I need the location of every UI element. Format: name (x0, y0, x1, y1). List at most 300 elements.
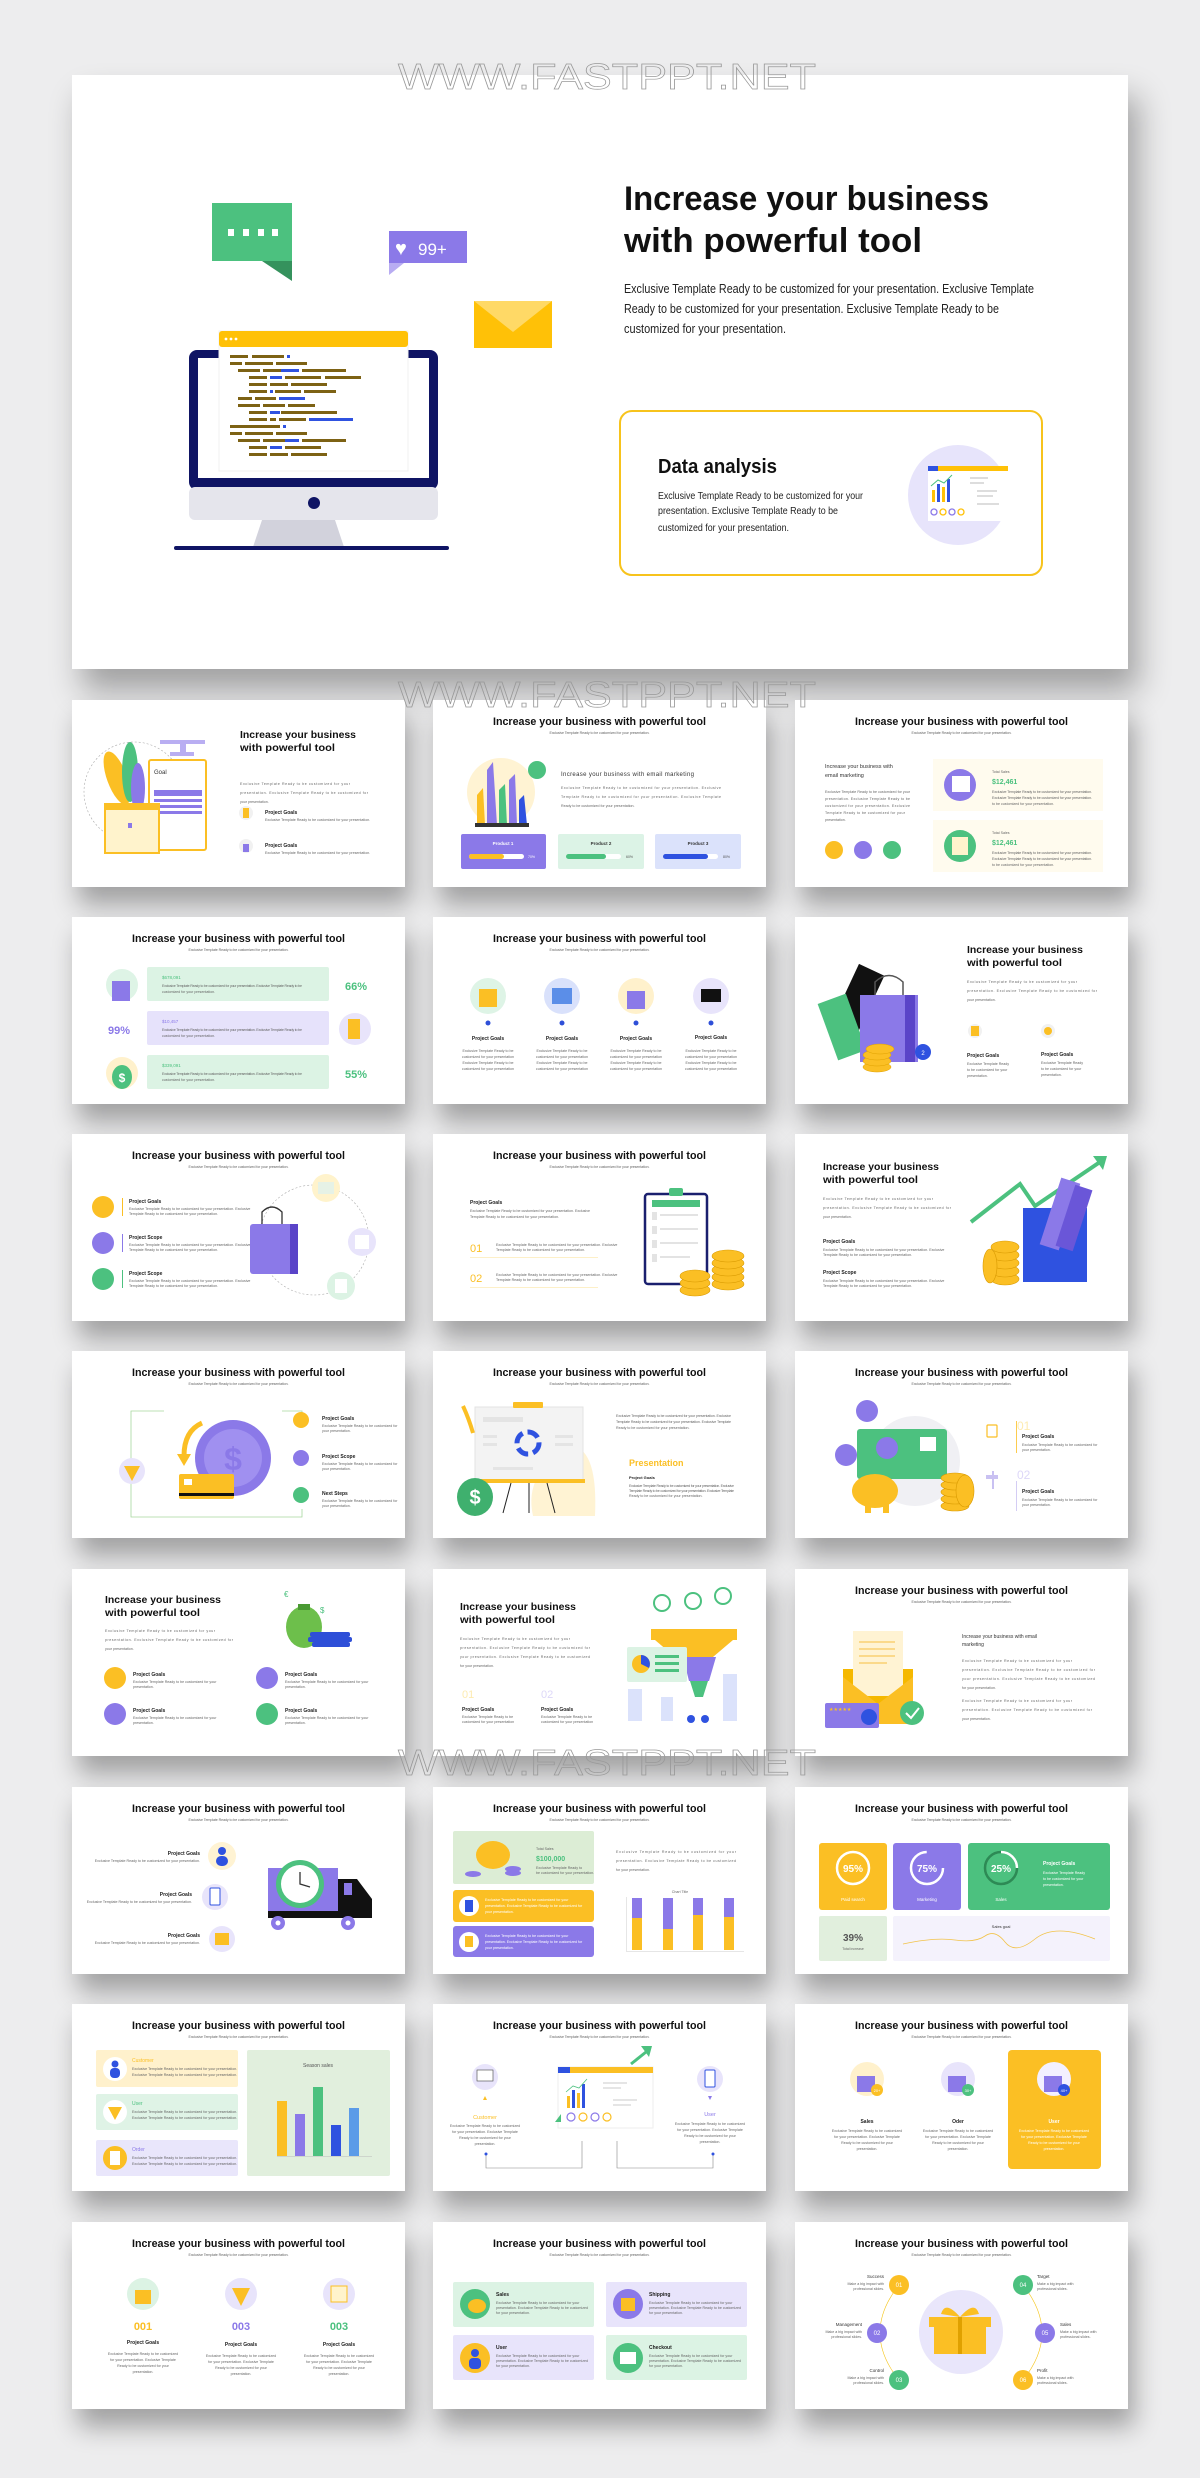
slide: percentages: $10,457 (162, 1019, 179, 1024)
slide: shopping bag and card (795, 917, 1128, 1104)
slide: numbered goals: 003 (330, 2321, 348, 2333)
panel: data analysis: Exclusive Template Ready to be customized for your (658, 490, 863, 502)
slide: email envelope: your presentation. Exclusive Template Ready to be customized (962, 1677, 1095, 1681)
slide: four project goals: Increase your business with powerful tool (493, 933, 706, 945)
slide: piggy bank stacked chart: Increase your business with powerful tool (493, 1803, 706, 1815)
slide: products progress: Ready to be customized for your presentation. (561, 804, 635, 808)
slide: numbered goals: Exclusive Template Ready to be customized (108, 2352, 178, 2356)
slide: numbered goals: Project Goals (323, 2342, 355, 2348)
slide: sales shipping user checkout: Exclusive Template Ready to be customized for your (496, 2354, 580, 2358)
slide: piggy bank: Exclusive Template Ready to be customized for (1022, 1498, 1098, 1502)
slide: season sales (72, 2004, 405, 2191)
slide: delivery truck: Increase your business with powerful tool (132, 1803, 345, 1815)
slide: growth arrow: Template Ready to be customized for your presentation. (823, 1253, 912, 1257)
slide: gift with six steps: Target (1037, 2274, 1050, 2279)
slide: numbered goals: presentation. (329, 2372, 349, 2376)
slide: dollar coin and steps: your presentation. (322, 1429, 351, 1433)
slide: sales shipping user checkout: Exclusive Template Ready to be customized for your (649, 2354, 733, 2358)
slide: products progress: Exclusive Template Ready to be customized for your presentation. Exclusive (561, 786, 721, 790)
slide: money bag goals: Exclusive Template Ready to be customized for your (285, 1716, 369, 1720)
slide: dollar coin and steps (72, 1351, 405, 1538)
slide: four project goals: customized for your presentation (685, 1067, 737, 1071)
slide: funnel: customized for your presentation (462, 1720, 514, 1724)
slide: piggy bank stacked chart: Exclusive Template Ready to be customized for your (485, 1934, 569, 1938)
slide: numbered goals: Increase your business with powerful tool (132, 2238, 345, 2250)
slide: money bag goals: presentation. Exclusive Template Ready to be customized for (105, 1638, 234, 1642)
slide: funnel: Project Goals (541, 1707, 573, 1713)
icon: envelope (474, 301, 552, 348)
slide: clipboard and coins: Exclusive Template Ready to be customized for your presentation. Exclusive (470, 1209, 590, 1213)
slide: gift with six steps: 02 (874, 2331, 881, 2337)
slide: percentages: $339,091 (162, 1063, 181, 1068)
slide: sales order user: User (1048, 2119, 1060, 2125)
slide: percentages: Exclusive Template Ready to be customized for your presentation. (188, 948, 288, 952)
slide: percentages: Increase your business with powerful tool (132, 933, 345, 945)
slide: piggy bank stacked chart: your presentation. (485, 1946, 514, 1950)
slide: sales shipping user checkout (433, 2222, 766, 2409)
slide: season sales: Customer (132, 2058, 154, 2064)
slide: four project goals: Project Goals (472, 1036, 504, 1042)
slide: gift with six steps: professional slides. (1037, 2381, 1068, 2385)
slide: piggy bank stacked chart: for your presentation. (616, 1868, 650, 1872)
slide: sales order user: for your presentation. Exclusive Template (1021, 2135, 1087, 2139)
slide: products progress: 80% (723, 855, 730, 859)
slide: total sales cards: Exclusive Template Ready to be customized for your presentation. (912, 731, 1012, 735)
slide: presentation easel: Increase your business with powerful tool (493, 1367, 706, 1379)
slide: presentation easel: $ (469, 1487, 481, 1509)
slide: numbered goals: Project Goals (127, 2340, 159, 2346)
slide: sales order user: presentation. (857, 2147, 877, 2151)
slide: clipboard and coins: Exclusive Template Ready to be customized for your presentation. (550, 1165, 650, 1169)
slide: goal clipboard: Exclusive Template Ready to be customized for your presentation. (265, 851, 370, 855)
slide: sales shipping user checkout: User (496, 2345, 507, 2351)
slide: total sales cards: Exclusive Template Ready to be customized for your presentation. (992, 857, 1092, 861)
slide: season sales: Exclusive Template Ready to be customized for your presentation. (132, 2067, 237, 2071)
icon: dashboard (908, 445, 1008, 545)
slide: money bag goals: presentation. (133, 1721, 154, 1725)
slide: four project goals: customized for your presentation (536, 1055, 588, 1059)
slide: delivery truck: Exclusive Template Ready to be customized for your presentation. (95, 1859, 200, 1863)
slide: gift with six steps: Profit (1037, 2368, 1048, 2373)
slide: presentation easel: Ready to be customized for your presentation. (616, 1426, 690, 1430)
slide: dollar coin and steps: Exclusive Template Ready to be customized for (322, 1462, 398, 1466)
slide: sales shipping user checkout: Exclusive Template Ready to be customized for your presentation. (550, 2253, 650, 2257)
slide: goals around circle: Exclusive Template Ready to be customized for your presentation. Exclusive (129, 1243, 250, 1247)
slide: sales order user: Increase your business with powerful tool (855, 2020, 1068, 2032)
slide: goals around circle (72, 1134, 405, 1321)
slide: gift with six steps: professional slides. (853, 2287, 884, 2291)
slide: dollar coin and steps: Exclusive Template Ready to be customized for (322, 1424, 398, 1428)
slide: four project goals: Exclusive Template Ready to be (536, 1049, 588, 1053)
slide: growth arrow (795, 1134, 1128, 1321)
paragraph: Ready to be customized for your presentation. Exclusive Template Ready to be (624, 302, 999, 316)
title: Increase your business (624, 180, 989, 218)
slide: products progress: Increase your business with email marketing (561, 772, 694, 778)
slide: numbered goals: Exclusive Template Ready to be customized (206, 2354, 276, 2358)
slide: total sales cards: Total Sales (992, 770, 1010, 774)
slide: clipboard and coins: Template Ready to be customized for your presentation. (496, 1278, 585, 1282)
slide: dollar coin and steps: Increase your business with powerful tool (132, 1367, 345, 1379)
slide: sales order user: Exclusive Template Ready to be customized (1019, 2129, 1089, 2133)
slide: gift with six steps: professional slides. (831, 2335, 862, 2339)
paragraph (624, 282, 1034, 336)
slide: products progress: Exclusive Template Ready to be customized for your presentation. (550, 731, 650, 735)
slide: goal clipboard: Exclusive Template Ready to be customized for your presentation. (265, 818, 370, 822)
hero slide (72, 75, 1128, 669)
slide: dollar coin and steps: Project Scope (322, 1454, 356, 1460)
slide: total sales cards: presentation. Exclusive Template Ready to be (825, 797, 910, 801)
title: with powerful tool (623, 222, 922, 260)
slide: goals around circle: Exclusive Template Ready to be customized for your presentation. Exclusive (129, 1207, 250, 1211)
slide: season sales: Exclusive Template Ready to be customized for your presentation. (132, 2073, 237, 2077)
slide: piggy bank: Project Goals (1022, 1434, 1054, 1440)
slide: money bag goals: with powerful tool (104, 1608, 200, 1619)
slide: shopping bag and card: presentation. (1041, 1073, 1062, 1077)
slide: funnel: for your presentation. (460, 1664, 494, 1668)
slide: season sales: Exclusive Template Ready to be customized for your presentation. (132, 2110, 237, 2114)
slide: piggy bank stacked chart: your presentation. (485, 1910, 514, 1914)
slide: goal clipboard: Increase your business (240, 730, 356, 741)
slide: money bag goals: Exclusive Template Ready to be customized for your (105, 1629, 216, 1633)
slide: piggy bank stacked chart: Chart Title (672, 1890, 688, 1894)
slide: numbered goals: 003 (232, 2321, 250, 2333)
slide: sales shipping user checkout: Checkout (649, 2345, 672, 2351)
icon: green chat bubble (212, 203, 292, 281)
slide: presentation easel: Project Goals (629, 1475, 656, 1480)
slide: piggy bank: 01 (1017, 1419, 1031, 1433)
slide: shopping bag and card: presentation. (967, 1074, 988, 1078)
slide: growth arrow: Exclusive Template Ready to be customized for your (823, 1197, 934, 1201)
slide: customer and user flow: Increase your business with powerful tool (493, 2020, 706, 2032)
slide: sales shipping user checkout: for your presentation. (649, 2311, 683, 2315)
slide: customer and user flow: presentation. (475, 2142, 495, 2146)
slide: goal clipboard: Project Goals (265, 810, 297, 816)
slide: sales order user: Oder (952, 2119, 964, 2125)
slide: season sales: Exclusive Template Ready to be customized for your presentation. (132, 2156, 237, 2160)
slide: goal clipboard: Goal (154, 770, 167, 776)
panel: data analysis: customized for your presentation. (658, 522, 789, 534)
slide: growth arrow: Exclusive Template Ready to be customized for your presentation. Exclusive (823, 1248, 944, 1252)
slide: numbered goals: for your presentation. Exclusive Template (306, 2360, 372, 2364)
slide: sales order user: Exclusive Template Ready to be customized (923, 2129, 993, 2133)
slide: piggy bank stacked chart: presentation. Exclusive Template Ready to be customized (616, 1859, 736, 1863)
slide: goals around circle: Template Ready to be customized for your presentation. (129, 1248, 218, 1252)
slide: funnel (433, 1569, 766, 1756)
slide: shopping bag and card: Project Goals (1041, 1052, 1073, 1058)
slide: gift with six steps: 06 (1020, 2378, 1027, 2384)
slide: dollar coin and steps: $ (224, 1441, 242, 1477)
slide: season sales: Increase your business with powerful tool (132, 2020, 345, 2032)
slide: gift with six steps: Make a big impact with (847, 2376, 884, 2380)
slide: dollar coin and steps: Exclusive Template Ready to be customized for your presentation. (188, 1382, 288, 1386)
slide: dollar coin and steps: your presentation. (322, 1467, 351, 1471)
slide: four project goals: Exclusive Template Ready to be customized for your presentation. (550, 948, 650, 952)
slide: customer and user flow: Exclusive Template Ready to be customized (675, 2122, 745, 2126)
slide: customer and user flow: for your presentation. Exclusive Template (452, 2130, 518, 2134)
slide: email envelope: Exclusive Template Ready to be customized for your (962, 1699, 1073, 1703)
slide: piggy bank: 02 (1017, 1468, 1031, 1482)
slide: email envelope: Exclusive Template Ready to be customized for your (962, 1659, 1073, 1663)
slide: shopping bag and card: 2 (921, 1051, 925, 1057)
slide: growth arrow: Project Scope (823, 1270, 857, 1276)
slide: gift with six steps: Success (867, 2274, 885, 2279)
slide: numbered goals: presentation. (133, 2370, 153, 2374)
slide: clipboard and coins: Template Ready to be customized for your presentation. (470, 1215, 559, 1219)
slide: total sales cards: $12,461 (992, 840, 1017, 847)
slide: numbered goals: Ready to be customized for your (215, 2366, 268, 2370)
slide: gift with six steps: Management (836, 2322, 863, 2327)
slide: sales order user: Ready to be customized for your (841, 2141, 894, 2145)
slide: piggy bank: Exclusive Template Ready to be customized for (1022, 1443, 1098, 1447)
watermark: below hero: WWW.FASTPPT.NET (398, 674, 816, 714)
slide: products progress: Product 1 (493, 841, 514, 846)
slide: piggy bank stacked chart: Exclusive Template Ready to be customized for your (616, 1850, 737, 1854)
slide: gift with six steps: Make a big impact with (1037, 2282, 1074, 2286)
slide: season sales: Exclusive Template Ready to be customized for your presentation. (132, 2116, 237, 2120)
slide: gift with six steps: professional slides. (853, 2381, 884, 2385)
slide: sales order user: 40+ (1061, 2088, 1068, 2093)
slide: shopping bag and card: Exclusive Template Ready (1041, 1061, 1083, 1065)
slide: percentages: 55% (345, 1069, 367, 1081)
slide: KPI dashboard: Exclusive Template Ready (1043, 1871, 1085, 1875)
slide: funnel: Increase your business (460, 1602, 576, 1613)
slide: delivery truck: Project Goals (168, 1851, 200, 1857)
slide: piggy bank stacked chart: $100,000 (536, 1856, 565, 1863)
slide: gift with six steps: professional slides. (1037, 2287, 1068, 2291)
slide: percentages: Exclusive Template Ready to be customized for your presentation. Exclusive Template Ready to be (162, 1072, 302, 1076)
slide: money bag goals: Exclusive Template Ready to be customized for your (285, 1680, 369, 1684)
slide: sales shipping user checkout: Shipping (649, 2292, 670, 2298)
slide: money bag goals: presentation. (133, 1685, 154, 1689)
slide: gift with six steps: 05 (1042, 2331, 1049, 2337)
slide: percentages: Exclusive Template Ready to be customized for your presentation. Exclusive Template Ready to be (162, 1028, 302, 1032)
slide: presentation easel: Template Ready to be customized for your presentation. Exclusive Template (616, 1420, 731, 1424)
slide: shopping bag and card: Exclusive Template Ready (967, 1062, 1009, 1066)
slide: four project goals: Project Goals (546, 1036, 578, 1042)
slide: sales order user: 30+ (965, 2088, 972, 2093)
slide: shopping bag and card: presentation. Exclusive Template Ready to be customized for (967, 989, 1098, 993)
slide: money bag goals (72, 1569, 405, 1756)
slide: KPI dashboard: 75% (917, 1864, 937, 1875)
slide: goals around circle: Project Scope (129, 1235, 163, 1241)
slide: dollar coin and steps: Exclusive Template Ready to be customized for (322, 1499, 398, 1503)
slide: piggy bank: Exclusive Template Ready to be customized for your presentation. (912, 1382, 1012, 1386)
slide: products progress (433, 700, 766, 887)
slide: four project goals: Project Goals (695, 1035, 727, 1041)
slide: four project goals: Exclusive Template Ready to be (685, 1049, 737, 1053)
slide: numbered goals: Project Goals (225, 2342, 257, 2348)
slide: presentation easel: Exclusive Template Ready to be customized for your presentation. Exclusive (629, 1484, 734, 1488)
slide: KPI dashboard: Sales goal (992, 1924, 1010, 1929)
slide: customer and user flow: User (704, 2112, 716, 2118)
slide: sales shipping user checkout: Exclusive Template Ready to be customized for your (649, 2301, 733, 2305)
slide: money bag goals: Project Goals (285, 1672, 317, 1678)
slide: goal clipboard: Project Goals (265, 843, 297, 849)
slide: delivery truck: Exclusive Template Ready to be customized for your presentation. (188, 1818, 288, 1822)
slide: funnel: your presentation. Exclusive Template Ready to be customized (460, 1655, 590, 1659)
slide: piggy bank stacked chart: presentation. Exclusive Template Ready to be customized for (485, 1940, 583, 1944)
slide: growth arrow: Project Goals (823, 1239, 855, 1245)
icon: like badge (389, 231, 467, 275)
slide: total sales cards: Increase your business with powerful tool (855, 716, 1068, 728)
slide: percentages: Exclusive Template Ready to be customized for your presentation. Exclusive Template Ready to be (162, 984, 302, 988)
slide: season sales: Exclusive Template Ready to be customized for your presentation. (132, 2162, 237, 2166)
slide: KPI dashboard: Paid search (841, 1897, 865, 1902)
slide: KPI dashboard: Total increase (842, 1947, 864, 1951)
slide: piggy bank: Project Goals (1022, 1489, 1054, 1495)
slide: sales shipping user checkout: presentation. Exclusive Template Ready to be customized (649, 2306, 741, 2310)
slide: shopping bag and card: with powerful tool (966, 958, 1062, 969)
slide: money bag goals: Project Goals (285, 1708, 317, 1714)
slide: email envelope: marketing (962, 1642, 984, 1648)
slide: delivery truck: Exclusive Template Ready to be customized for your presentation. (87, 1900, 192, 1904)
slide: dollar coin and steps: your presentation. (322, 1504, 351, 1508)
slide: percentages: $ (119, 1071, 126, 1085)
slide: dollar coin and steps: Project Goals (322, 1416, 354, 1422)
slide: total sales cards: to be customized for your presentation. (992, 802, 1054, 806)
paragraph: customized for your presentation. (624, 322, 786, 336)
slide: email envelope: ★★★★★ (829, 1707, 852, 1713)
slide: numbered goals: for your presentation. Exclusive Template (110, 2358, 176, 2362)
slide: four project goals: customized for your presentation (685, 1055, 737, 1059)
slide: customer and user flow: for your presentation. Exclusive Template (677, 2128, 743, 2132)
slide: products progress: 60% (626, 855, 633, 859)
slide: customer and user flow: Ready to be customized for your (684, 2134, 737, 2138)
slide: piggy bank: your presentation. (1022, 1503, 1051, 1507)
slide: shopping bag and card: Exclusive Template Ready to be customized for your (967, 980, 1078, 984)
slide: funnel: Project Goals (462, 1707, 494, 1713)
slide: sales order user: Exclusive Template Ready to be customized for your presentation. (912, 2035, 1012, 2039)
slide: KPI dashboard: Exclusive Template Ready to be customized for your presentation. (912, 1818, 1012, 1822)
slide: delivery truck: Project Goals (160, 1892, 192, 1898)
slide: numbered goals: Exclusive Template Ready to be customized for your presentation. (188, 2253, 288, 2257)
slide: email envelope: presentation. Exclusive Template Ready to be customized for (962, 1668, 1096, 1672)
slide: goal clipboard: your presentation. (240, 800, 269, 804)
slide: products progress: Product 2 (591, 841, 612, 846)
slide: goals around circle: Exclusive Template Ready to be customized for your presentation. (188, 1165, 288, 1169)
slide: presentation easel: Presentation (629, 1458, 684, 1468)
slide: goals around circle: Increase your business with powerful tool (132, 1150, 345, 1162)
slide: total sales cards: Total Sales (992, 831, 1010, 835)
slide: presentation easel: Ready to be customized for your presentation. (629, 1494, 703, 1498)
slide: gift with six steps: professional slides. (1060, 2335, 1091, 2339)
slide: four project goals: customized for your presentation (610, 1055, 662, 1059)
slide: sales order user: Sales (860, 2119, 874, 2125)
slide: numbered goals: Exclusive Template Ready to be customized (304, 2354, 374, 2358)
slide: money bag goals: your presentation. (105, 1647, 134, 1651)
slide: email envelope: for your presentation. (962, 1686, 996, 1690)
slide: growth arrow: with powerful tool (822, 1175, 918, 1186)
slide: customer and user flow: Ready to be customized for your (459, 2136, 512, 2140)
slide: clipboard and coins: Exclusive Template Ready to be customized for your presentation. Exclusive (496, 1273, 617, 1277)
slide: funnel: presentation. Exclusive Template Ready to be customized for (460, 1646, 591, 1650)
slide: four project goals: Exclusive Template Ready to be (610, 1061, 662, 1065)
slide: piggy bank stacked chart: be customized for your presentation. (536, 1871, 594, 1875)
slide: total sales cards (795, 700, 1128, 887)
slide: sales shipping user checkout: Exclusive Template Ready to be customized for your (496, 2301, 580, 2305)
slide: four project goals: Exclusive Template Ready to be (685, 1061, 737, 1065)
slide: money bag goals: presentation. (285, 1685, 306, 1689)
slide: clipboard and coins: Exclusive Template Ready to be customized for your presentation. Exclusive (496, 1243, 617, 1247)
slide: total sales cards: Exclusive Template Ready to be customized for your (825, 790, 911, 794)
slide: total sales cards: Increase your business with (825, 764, 893, 770)
slide: goals around circle: Project Scope (129, 1271, 163, 1277)
slide: delivery truck (72, 1787, 405, 1974)
slide: sales shipping user checkout: for your presentation. (496, 2311, 530, 2315)
slide: four project goals (433, 917, 766, 1104)
slide: email envelope (795, 1569, 1128, 1756)
slide: gift with six steps: Make a big impact with (1060, 2330, 1097, 2334)
slide: shopping bag and card: your presentation. (967, 998, 996, 1002)
slide: sales shipping user checkout: presentation. Exclusive Template Ready to be customized (496, 2359, 588, 2363)
slide: funnel: Exclusive Template Ready to be (541, 1715, 592, 1719)
slide: customer and user flow: presentation. (700, 2140, 720, 2144)
slide: goal clipboard: presentation. Exclusive Template Ready to be customized for (240, 791, 369, 795)
slide: gift with six steps: Make a big impact with (825, 2330, 862, 2334)
slide: shopping bag and card: Project Goals (967, 1053, 999, 1059)
slide: piggy bank stacked chart (433, 1787, 766, 1974)
slide: four project goals: customized for your presentation (462, 1067, 514, 1071)
slide: sales shipping user checkout: Increase your business with powerful tool (493, 2238, 706, 2250)
slide: sales order user: Ready to be customized for your (932, 2141, 985, 2145)
slide: delivery truck: Project Goals (168, 1933, 200, 1939)
slide: piggy bank stacked chart: Exclusive Template Ready to be customized for your (485, 1898, 569, 1902)
slide: gift with six steps: Make a big impact with (1037, 2376, 1074, 2380)
slide: percentages: customized for your presentation. (162, 1078, 215, 1082)
slide: numbered goals: presentation. (231, 2372, 251, 2376)
slide: goal clipboard: with powerful tool (239, 743, 335, 754)
slide: money bag goals: Project Goals (133, 1672, 165, 1678)
slide: sales shipping user checkout: Sales (496, 2292, 509, 2298)
slide: percentages: 99% (108, 1025, 130, 1037)
slide: percentages: 66% (345, 981, 367, 993)
slide: numbered goals: Ready to be customized for your (117, 2364, 170, 2368)
slide: piggy bank: Increase your business with powerful tool (855, 1367, 1068, 1379)
slide: growth arrow: Template Ready to be customized for your presentation. (823, 1284, 912, 1288)
slide: goals around circle: Template Ready to be customized for your presentation. (129, 1284, 218, 1288)
slide: email envelope: presentation. Exclusive Template Ready to be customized for (962, 1708, 1093, 1712)
slide: shopping bag and card: to be customized for your (967, 1068, 1008, 1072)
slide: four project goals: Exclusive Template Ready to be (462, 1061, 514, 1065)
slide: clipboard and coins: Template Ready to be customized for your presentation. (496, 1248, 585, 1252)
slide: KPI dashboard: Marketing (917, 1897, 937, 1902)
slide: customer and user flow (433, 2004, 766, 2191)
slide: customer and user flow: Customer (473, 2115, 497, 2121)
slide: products progress: 70% (528, 855, 535, 859)
slide: shopping bag and card: to be customized for your (1041, 1067, 1082, 1071)
slide: clipboard and coins: 02 (470, 1273, 482, 1285)
slide: email envelope: Increase your business with email (962, 1634, 1037, 1640)
paragraph: Exclusive Template Ready to be customized for your presentation. Exclusive Template (624, 282, 1034, 296)
slide: four project goals: customized for your presentation (536, 1067, 588, 1071)
slide: sales order user: Ready to be customized for your (1028, 2141, 1081, 2145)
slide: numbered goals: 001 (134, 2321, 152, 2333)
panel: data analysis: Data analysis (658, 456, 777, 478)
slide: money bag goals: Exclusive Template Ready to be customized for your (133, 1716, 217, 1720)
slide: products progress: Increase your business with powerful tool (493, 716, 706, 728)
slide: total sales cards: Exclusive Template Ready to be customized for your presentation. (992, 796, 1092, 800)
slide: funnel: with powerful tool (459, 1615, 555, 1626)
slide: four project goals: Exclusive Template Ready to be (536, 1061, 588, 1065)
slide: sales shipping user checkout: presentation. Exclusive Template Ready to be customized (496, 2306, 588, 2310)
slide: percentages: $678,091 (162, 975, 181, 980)
slide: total sales cards: to be customized for your presentation. (992, 863, 1054, 867)
slide: numbered goals: for your presentation. Exclusive Template (208, 2360, 274, 2364)
slide: KPI dashboard: 95% (843, 1864, 863, 1875)
slide: products progress: Template Ready to be customized for your presentation. Exclusive Template (561, 795, 721, 799)
slide: total sales cards: Exclusive Template Ready to be customized for your presentation. (992, 790, 1092, 794)
slide: presentation easel: Exclusive Template Ready to be customized for your presentation. (550, 1382, 650, 1386)
